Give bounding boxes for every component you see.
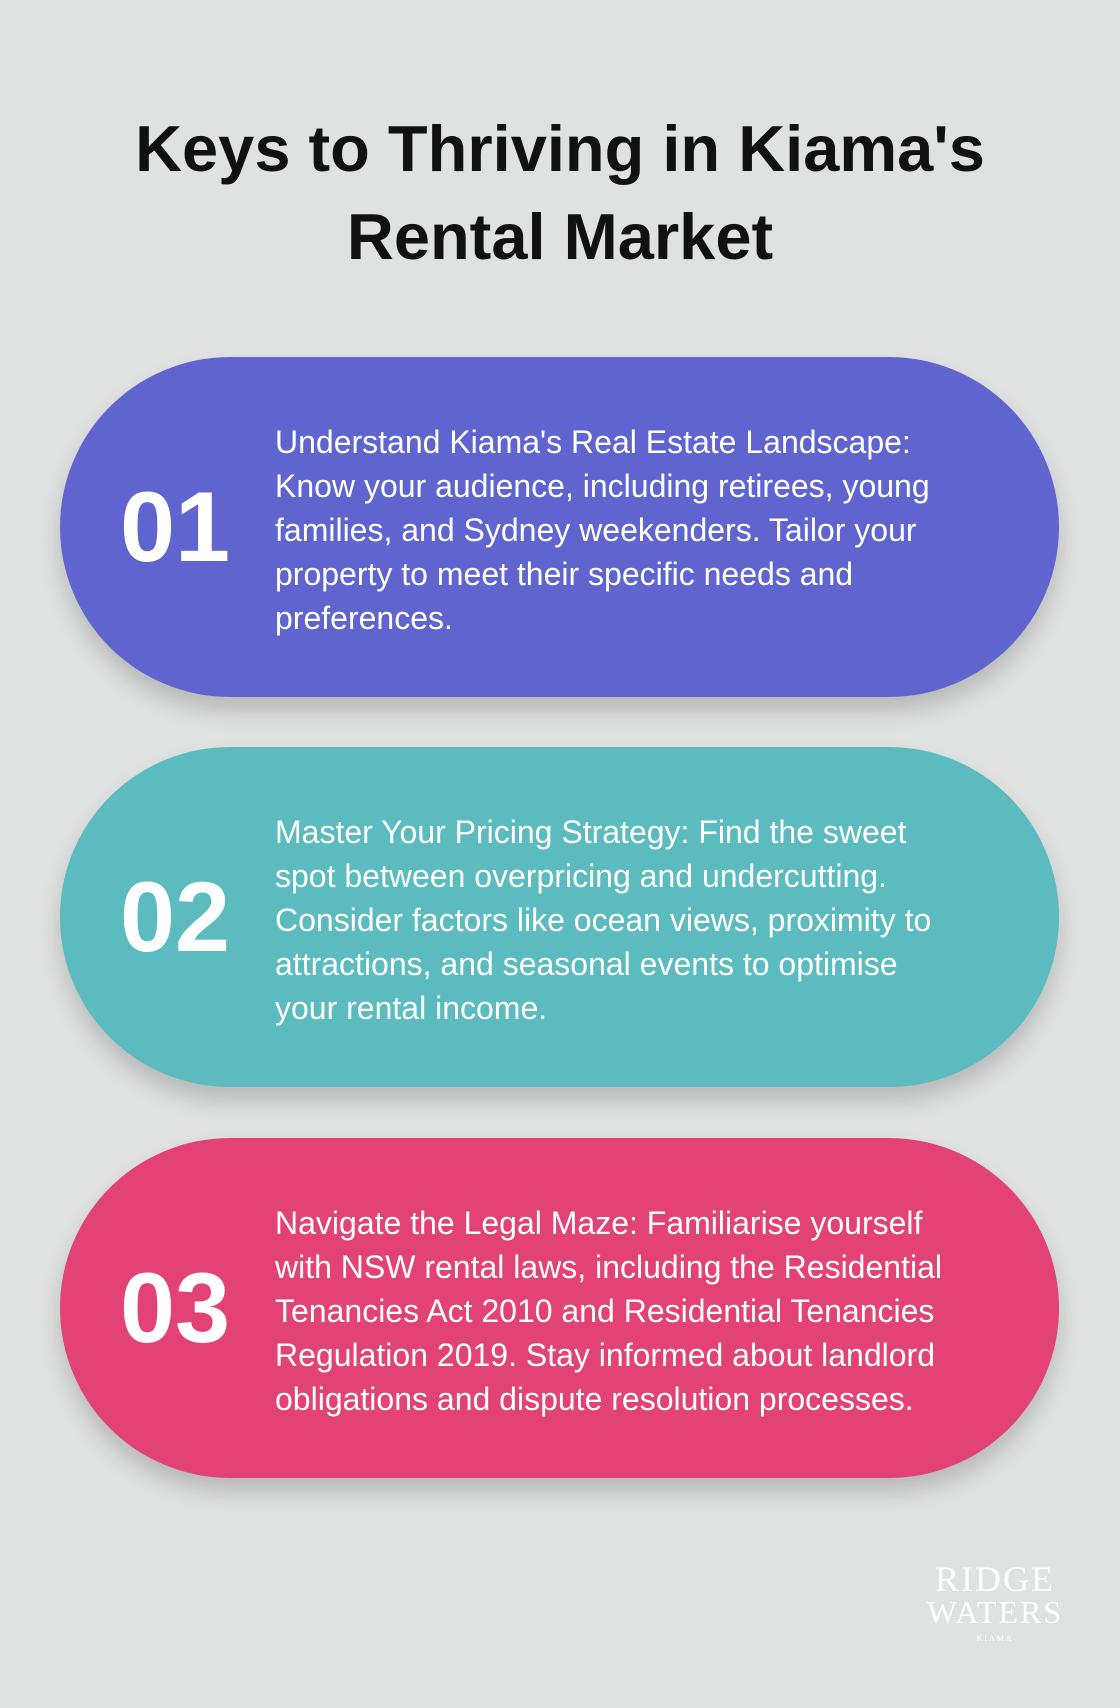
text 03: with NSW rental laws, including the Residential <box>275 1249 942 1285</box>
text 03: Navigate the Legal Maze: Familiarise yourself <box>275 1205 922 1241</box>
number 02: 02 <box>120 861 230 972</box>
text 02: Master Your Pricing Strategy: Find the sweet <box>275 814 906 850</box>
panel: 03 <box>60 1138 1059 1478</box>
text 02: your rental income. <box>275 990 547 1026</box>
text 02: Consider factors like ocean views, proximity to <box>275 902 931 938</box>
panel: 01 <box>60 357 1059 697</box>
text 01: Know your audience, including retirees, young <box>275 468 930 504</box>
text 01 <box>275 424 930 636</box>
text 03: Regulation 2019. Stay informed about landlord <box>275 1337 935 1373</box>
text 02: spot between overpricing and undercutting. <box>275 858 887 894</box>
text 03 <box>275 1205 942 1417</box>
text 03: Tenancies Act 2010 and Residential Tenancies <box>275 1293 934 1329</box>
logo: RIDGE <box>935 1559 1055 1599</box>
number 01: 01 <box>120 471 230 582</box>
text 01: property to meet their specific needs and <box>275 556 853 592</box>
title: Rental Market <box>347 200 773 273</box>
logo <box>926 1559 1063 1643</box>
text 01: preferences. <box>275 600 453 636</box>
text 02: attractions, and seasonal events to optimise <box>275 946 898 982</box>
text 03: obligations and dispute resolution processes. <box>275 1381 914 1417</box>
panel: 02 <box>60 747 1059 1087</box>
number 03: 03 <box>120 1252 230 1363</box>
title <box>135 112 985 273</box>
logo: WATERS <box>927 1594 1063 1630</box>
logo: KIAMA <box>976 1634 1014 1643</box>
text 01: Understand Kiama's Real Estate Landscape: <box>275 424 911 460</box>
text 01: families, and Sydney weekenders. Tailor your <box>275 512 917 548</box>
title: Keys to Thriving in Kiama's <box>135 112 985 185</box>
text 02 <box>275 814 931 1026</box>
